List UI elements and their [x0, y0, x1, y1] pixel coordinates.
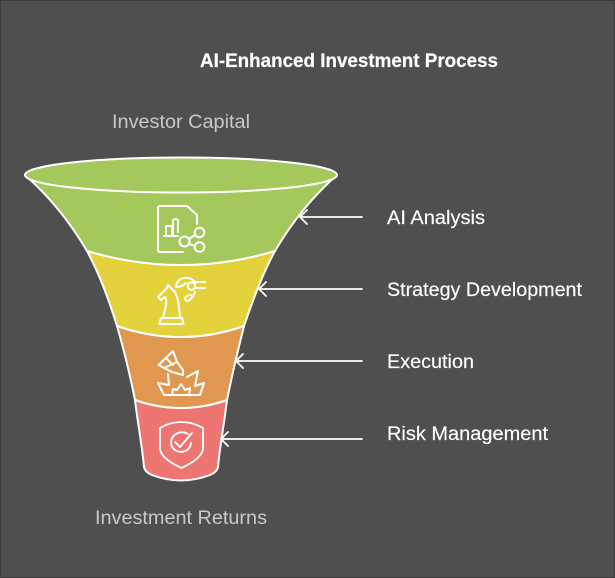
arrow: risk management — [221, 432, 362, 446]
label: AI analysis: AI Analysis — [387, 208, 485, 229]
funnel input label: Investor Capital — [112, 112, 250, 133]
funnel mouth ellipse — [25, 158, 337, 192]
icon: shield with check — [160, 422, 203, 468]
icon: rocket and explosion — [158, 351, 204, 395]
title: AI-Enhanced Investment Process — [200, 51, 498, 72]
arrow: strategy development — [259, 282, 362, 296]
icon: document with chart and share nodes — [158, 206, 204, 252]
label: execution: Execution — [387, 352, 474, 373]
funnel layer: execution — [117, 326, 244, 408]
label: strategy development: Strategy Development — [387, 280, 583, 301]
arrow: AI analysis — [300, 210, 362, 224]
funnel layer: strategy development — [87, 251, 275, 337]
funnel layer: risk management — [135, 400, 227, 480]
icon: chess knight with AI eye — [158, 278, 205, 324]
funnel output label: Investment Returns — [95, 508, 267, 529]
funnel — [25, 158, 337, 480]
arrow: execution — [236, 354, 362, 368]
label: risk management: Risk Management — [387, 424, 549, 445]
funnel layer: AI analysis — [25, 175, 337, 265]
